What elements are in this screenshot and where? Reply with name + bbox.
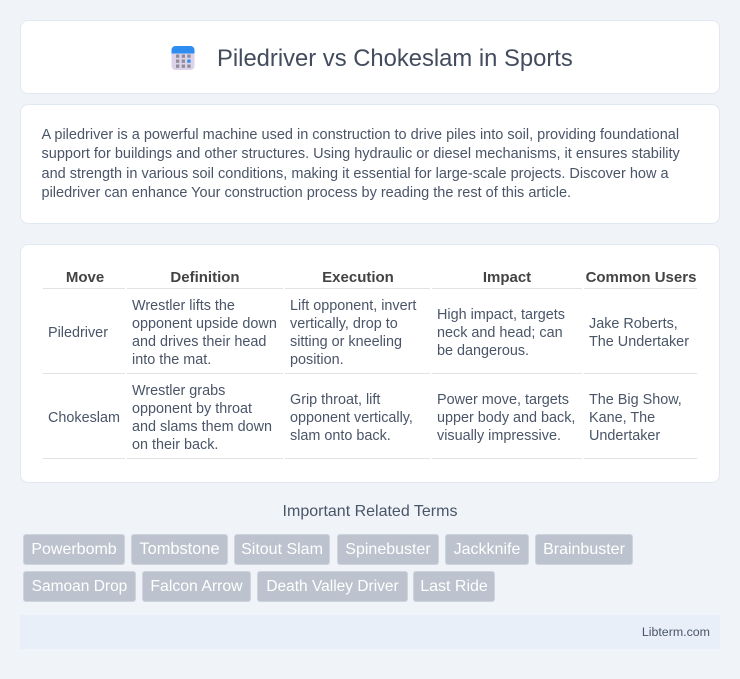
tag: Sitout Slam — [241, 541, 323, 558]
table header row: Move — [66, 269, 104, 286]
row: Chokeslam: opponent vertically, — [290, 410, 413, 426]
tag — [23, 534, 125, 565]
intro paragraph: and strength in various soil conditions, making it essential for large-scale projects. Discover how a — [42, 166, 669, 182]
row: Chokeslam: and slams them down — [132, 419, 272, 435]
row: Piledriver: Lift opponent, invert — [290, 298, 416, 314]
icon: calendar — [172, 46, 194, 70]
row: Piledriver: and drives their head — [132, 334, 266, 350]
tag: Last Ride — [420, 578, 488, 595]
tag — [131, 534, 228, 565]
intro paragraph: support for buildings and other structures. Using hydraulic or diesel mechanisms, it ensures stability — [42, 146, 680, 162]
row: Piledriver: Wrestler lifts the — [132, 298, 235, 314]
row: Piledriver: Piledriver — [48, 325, 108, 341]
related terms heading: Important Related Terms — [283, 503, 457, 520]
row: Chokeslam: on their back. — [132, 437, 218, 453]
row: Chokeslam: Chokeslam — [48, 410, 120, 426]
row: Piledriver: neck and head; can — [437, 325, 563, 341]
row: Piledriver: sitting or kneeling — [290, 334, 402, 350]
row: Chokeslam: The Big Show, — [589, 392, 682, 408]
row: Piledriver: be dangerous. — [437, 343, 529, 359]
tag: Brainbuster — [543, 541, 625, 558]
row: Piledriver: The Undertaker — [589, 334, 689, 350]
tag — [413, 571, 495, 602]
intro paragraph: A piledriver is a powerful machine used in construction to drive piles into soil, providing foundational — [42, 126, 679, 142]
tag: Jackknife — [454, 541, 520, 558]
tag — [535, 534, 633, 565]
related terms tags — [23, 534, 633, 602]
tag: Falcon Arrow — [150, 578, 243, 595]
row: Chokeslam: Wrestler grabs — [132, 383, 225, 399]
row: Piledriver: position. — [290, 352, 344, 368]
tag: Spinebuster — [345, 541, 431, 558]
row: Piledriver: opponent upside down — [132, 316, 277, 332]
row: Chokeslam: Undertaker — [589, 428, 660, 444]
intro paragraph: piledriver can enhance Your construction process by reading the rest of this article. — [42, 185, 571, 201]
row: Piledriver: into the mat. — [132, 352, 211, 368]
row: Chokeslam — [48, 383, 682, 453]
row: Piledriver: High impact, targets — [437, 307, 565, 323]
row: Chokeslam: opponent by throat — [132, 401, 252, 417]
intro paragraph — [42, 126, 680, 201]
header panel — [20, 20, 720, 94]
tag — [23, 571, 136, 602]
title: Piledriver vs Chokeslam in Sports — [217, 45, 573, 72]
row: Chokeslam: Kane, The — [589, 410, 655, 426]
tag: Death Valley Driver — [266, 578, 399, 595]
tag — [142, 571, 251, 602]
tag: Tombstone — [139, 540, 220, 558]
table header row — [43, 269, 697, 289]
table header row: Execution — [322, 269, 394, 286]
table header row: Common Users — [586, 269, 696, 286]
footer credit: Libterm.com — [642, 625, 710, 639]
row: Piledriver — [48, 298, 689, 368]
footer bar — [20, 615, 720, 649]
tag — [234, 534, 330, 565]
row: Chokeslam: Power move, targets — [437, 392, 569, 408]
tag: Powerbomb — [31, 541, 117, 558]
row: Piledriver: vertically, drop to — [290, 316, 398, 332]
tag — [337, 534, 439, 565]
table header row: Definition — [170, 269, 240, 286]
row: Chokeslam: upper body and back, — [437, 410, 575, 426]
tag — [445, 534, 529, 565]
row: Chokeslam: visually impressive. — [437, 428, 561, 444]
comparison table panel — [20, 244, 720, 483]
intro text panel — [20, 104, 720, 224]
row: Piledriver: Jake Roberts, — [589, 316, 678, 332]
table header row: Impact — [483, 269, 531, 286]
row: Chokeslam: Grip throat, lift — [290, 392, 380, 408]
row: Chokeslam: slam onto back. — [290, 428, 391, 444]
tag: Samoan Drop — [32, 578, 127, 595]
tag — [257, 571, 408, 602]
